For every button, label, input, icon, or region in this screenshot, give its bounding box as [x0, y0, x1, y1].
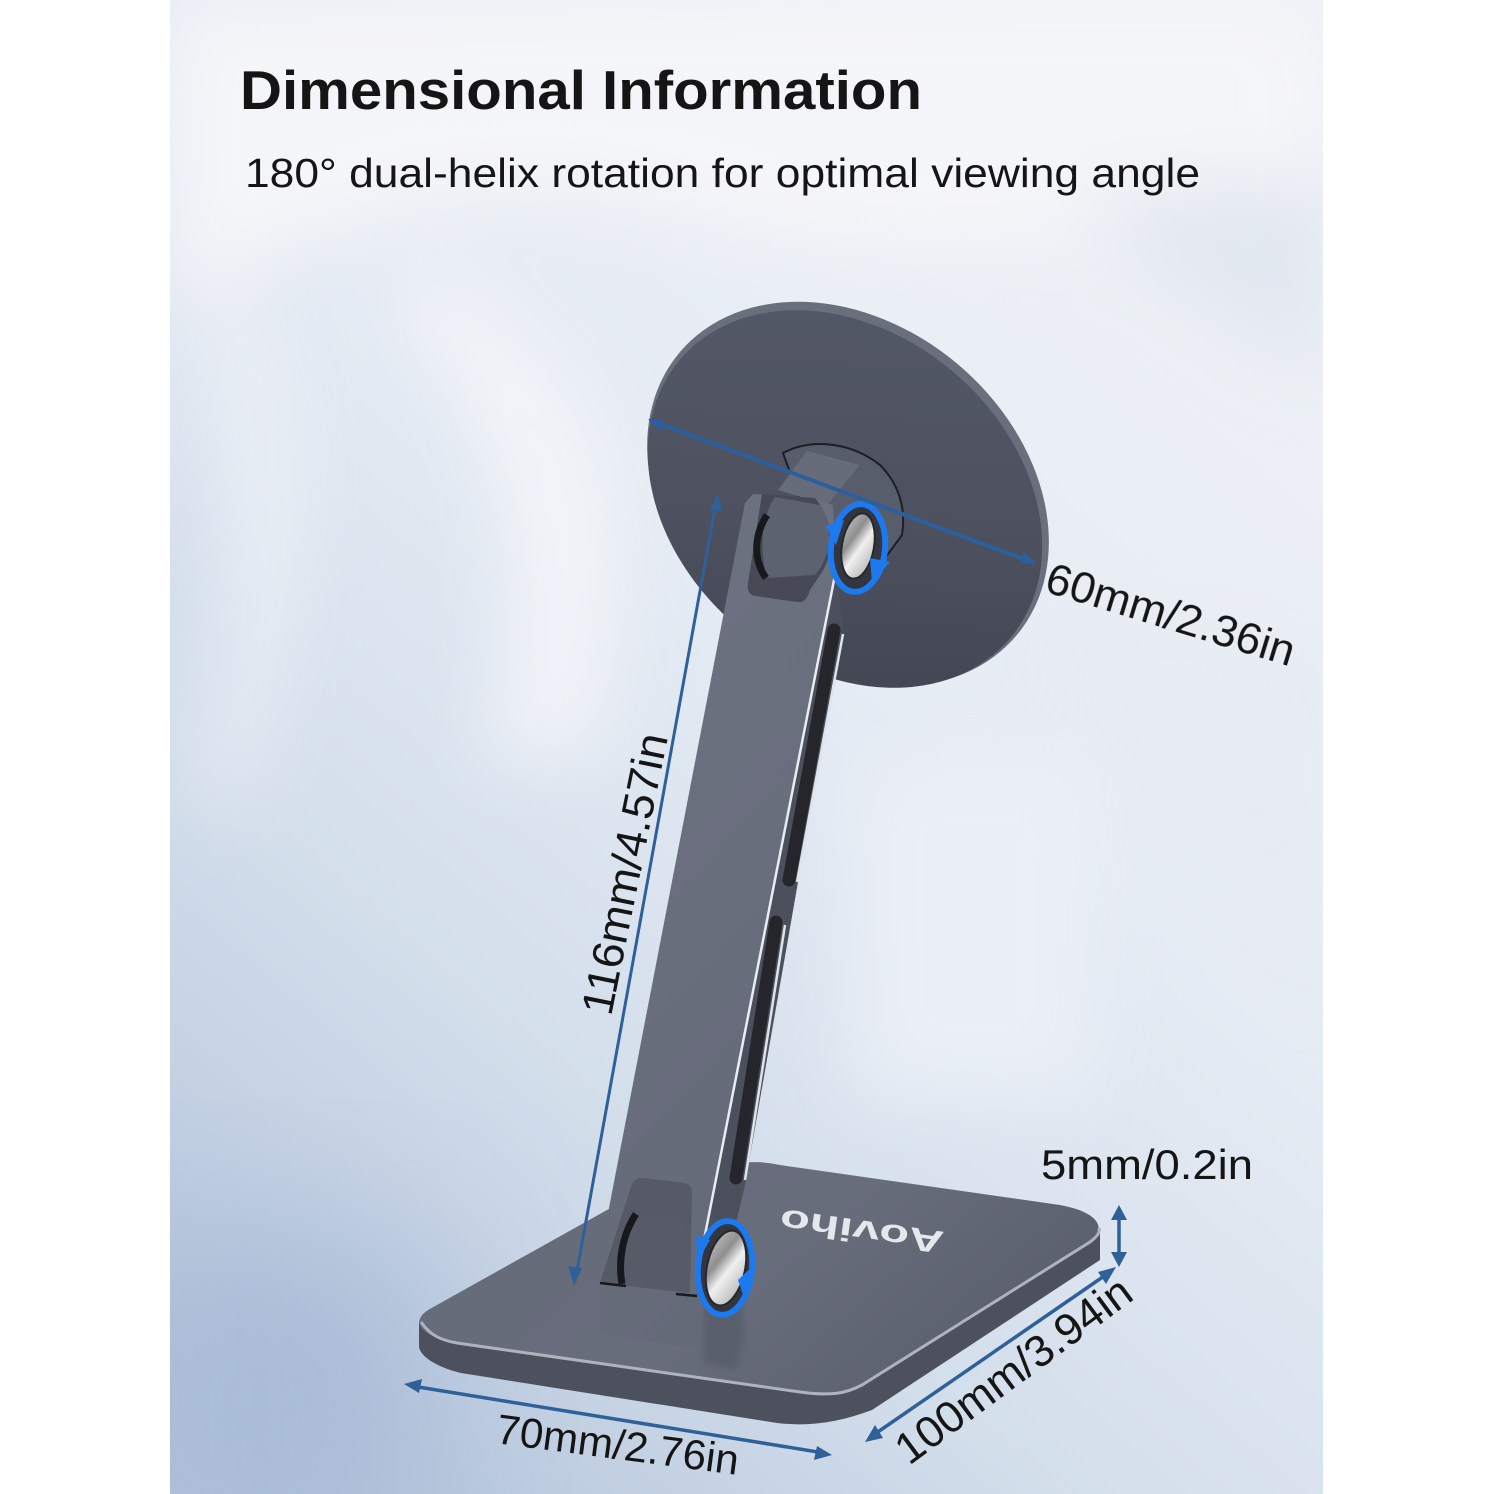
dimension: arm length: [568, 493, 722, 1286]
lower pivot pin with rotation arrows: [694, 1219, 756, 1317]
lower pivot pocket: [600, 1178, 692, 1293]
dimension: base length: 100mm/3.94in: [886, 1267, 1142, 1474]
dimension: base thickness: 5mm/0.2in: [1041, 1141, 1253, 1188]
subtitle: 180° dual-helix rotation for optimal viewing angle: [245, 150, 1200, 196]
upper pivot pin with rotation arrows: [826, 501, 890, 595]
arm front face: [598, 494, 836, 1350]
dimension: arm length: 116mm/4.57in: [573, 729, 678, 1019]
stand arm: [598, 494, 843, 1370]
dimension: base thickness: [1041, 1141, 1253, 1267]
title: Dimensional Information: [240, 59, 922, 121]
magnetic disc mount: [570, 222, 1126, 766]
dimension: base width: [404, 1379, 832, 1484]
arm side with slots: [704, 570, 843, 1240]
dimension: disc diameter: 60mm/2.36in: [1040, 554, 1301, 676]
brand logo: Aoviho: [778, 1202, 946, 1261]
upper pivot pocket: [748, 494, 831, 602]
dimension: base width: 70mm/2.76in: [494, 1405, 742, 1484]
infographic canvas: [170, 0, 1323, 1494]
arm foot shadow: [702, 1295, 744, 1370]
base plate: [419, 1162, 1100, 1424]
dimension: disc diameter: [648, 419, 1301, 676]
